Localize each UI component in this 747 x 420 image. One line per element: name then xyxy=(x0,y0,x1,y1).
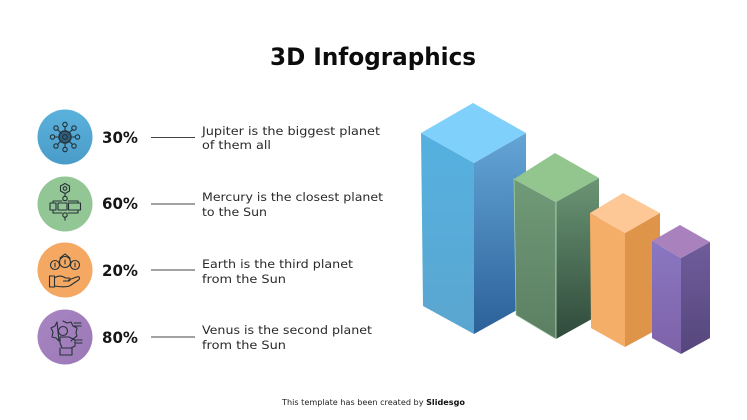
icon: purple circle with gear bulb and hand xyxy=(38,310,92,364)
description: Jupiter: of them all xyxy=(202,138,271,152)
icon: orange circle with hand and coins xyxy=(38,242,92,298)
percentage: 60%: 60% xyxy=(102,194,138,213)
footer credit: This template has been created by Slidesgo xyxy=(281,398,466,407)
title: 3D Infographics xyxy=(270,43,476,71)
bar: purple xyxy=(652,225,710,354)
icon: green circle with flowchart xyxy=(38,176,92,232)
icon: blue circle with network xyxy=(38,110,92,164)
percentage: 30%: 30% xyxy=(102,128,138,147)
row: Jupiter 30% xyxy=(38,110,381,164)
bar: green xyxy=(514,153,599,339)
row: Mercury 60% xyxy=(38,176,384,232)
description: Earth: Earth is the third planet xyxy=(202,257,354,271)
3D bar chart xyxy=(421,103,710,354)
description: Jupiter: Jupiter is the biggest planet xyxy=(201,124,381,138)
row: Venus 80% xyxy=(38,310,373,364)
description: Mercury: to the Sun xyxy=(202,205,267,219)
row: Earth 20% xyxy=(38,242,354,298)
description: Mercury: Mercury is the closest planet xyxy=(202,190,384,204)
description: Earth: from the Sun xyxy=(202,272,286,286)
bar: blue xyxy=(421,103,526,334)
description: Venus: Venus is the second planet xyxy=(202,323,373,337)
percentage: 20%: 20% xyxy=(102,261,138,280)
bar: orange xyxy=(590,193,660,347)
description: Venus: from the Sun xyxy=(202,338,286,352)
percentage: 80%: 80% xyxy=(102,328,138,347)
